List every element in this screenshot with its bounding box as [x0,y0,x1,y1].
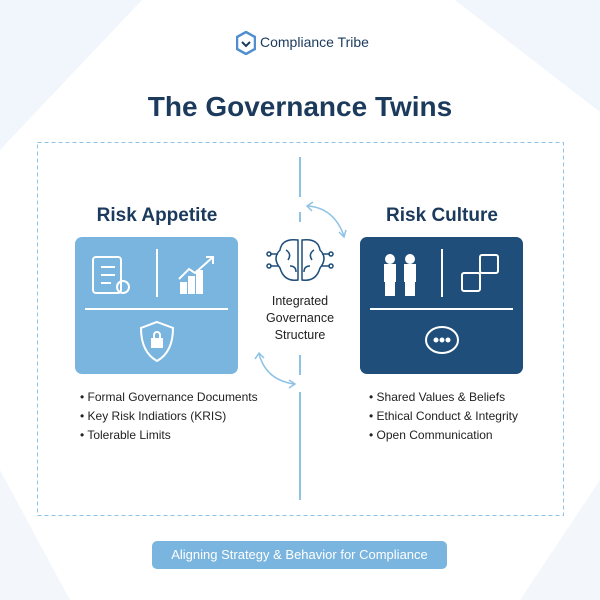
bullets: risk culture: Open Communication [377,428,493,442]
title: The Governance Twins [148,91,452,122]
icon: chart [179,257,213,293]
bullets: risk appetite: Formal Governance Documents [88,390,258,404]
footer banner [152,541,447,569]
panel: risk culture card [360,237,523,374]
bullets: risk appetite [80,390,258,442]
panel: risk appetite card [75,237,238,374]
icon: shield [141,322,173,361]
bullets: risk culture: Ethical Conduct & Integrity [377,409,518,423]
icon: clipboard [93,257,129,293]
center: brain and label: Integrated Governance Structure [266,294,334,342]
arrow: upper arc [306,202,347,238]
bullets: risk culture: Shared Values & Beliefs [377,390,505,404]
icon: chat bubble [426,327,458,353]
bullets: risk culture [370,390,518,442]
bullets: risk appetite: Key Risk Indiatiors (KRIS) [88,409,226,423]
center: brain and label [266,239,334,342]
heading: Risk Culture: Risk Culture [386,205,498,226]
heading: Risk Appetite: Risk Appetite [97,205,217,226]
bullets: risk appetite: Tolerable Limits [87,428,171,442]
icon: people [385,255,415,295]
footer banner: Aligning Strategy & Behavior for Compliance [171,547,428,562]
icon: puzzle [462,255,498,291]
logo: Compliance Tribe [260,34,369,50]
arrow: lower arc [254,352,296,388]
logo [236,31,369,55]
